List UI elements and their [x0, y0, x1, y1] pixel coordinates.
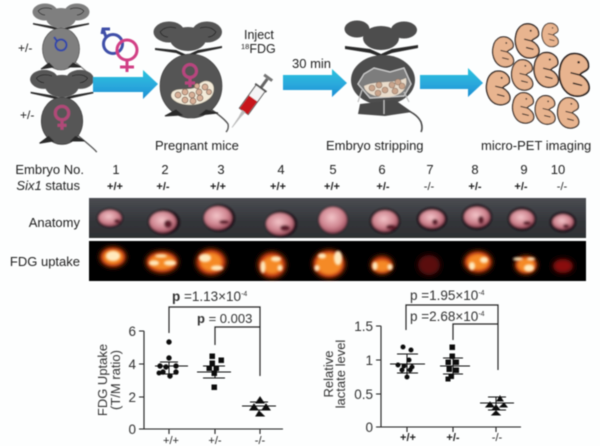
- embryo numbers: 8: [471, 162, 479, 177]
- y tick labels: 1.5: [354, 319, 373, 334]
- p value 2: -4: [478, 311, 485, 318]
- p value 2: p = 0.003: [197, 311, 252, 326]
- label: pregnant mice: Pregnant mice: [155, 138, 239, 153]
- icon: pregnant mouse: [154, 22, 228, 132]
- status labels: -/-: [557, 181, 568, 193]
- row label: Six1 status: Six1 status: [16, 178, 80, 193]
- chart: lactate scatter: [321, 288, 521, 444]
- y tick labels: [128, 324, 136, 437]
- status labels: +/-: [514, 181, 528, 193]
- status labels: -/-: [424, 181, 435, 193]
- x tick labels: [400, 432, 503, 444]
- y tick labels: 4: [128, 357, 136, 372]
- group +/+ points: [390, 345, 425, 379]
- group +/- points: [197, 354, 231, 390]
- row label: FDG uptake: FDG uptake: [10, 254, 80, 269]
- embryo numbers: 10: [551, 162, 565, 177]
- status labels: [107, 181, 568, 193]
- y tick labels: 2: [128, 390, 136, 405]
- status labels: +/-: [156, 181, 170, 193]
- status labels: +/-: [468, 181, 482, 193]
- panel: anatomy photo: [89, 198, 586, 238]
- y tick labels: 0.5: [354, 387, 373, 402]
- icon: embryos in uterus: [171, 81, 214, 105]
- x tick labels: -/-: [492, 432, 503, 444]
- arrow: to imaging: [420, 68, 483, 97]
- y axis label: lactate: lactate level: [333, 340, 348, 408]
- label: 18FDG: FDG: [249, 42, 276, 56]
- icon: female mouse: [30, 70, 97, 152]
- p value 1: p =1.13×10: [172, 289, 241, 304]
- status labels: +/+: [107, 181, 123, 193]
- label: 30 min: 30 min: [292, 56, 331, 71]
- chart: FDG uptake scatter: [95, 289, 283, 446]
- axes: [376, 326, 521, 432]
- label: embryo stripping: Embryo stripping: [326, 138, 424, 153]
- group +/- points: [440, 345, 470, 381]
- y tick labels: [354, 319, 373, 435]
- arrow: to pregnant mice: [93, 70, 158, 99]
- p value 1: -4: [478, 290, 485, 297]
- axes: [139, 331, 283, 434]
- label: female genotype: +/-: [20, 108, 34, 122]
- status labels: +/-: [376, 181, 390, 193]
- row label: embryo number: Embryo No.: [15, 162, 84, 177]
- embryo numbers: 4: [277, 162, 285, 177]
- label: micro-PET imaging: micro-PET imaging: [481, 138, 591, 153]
- icon: female symbol on mouse: [55, 106, 69, 130]
- p value 1: p =1.95×10: [410, 288, 478, 303]
- y tick labels: 0: [128, 422, 136, 437]
- icon: male symbol on mouse: [54, 37, 66, 50]
- significance brackets: [169, 307, 260, 376]
- icon: exposed embryos: [358, 68, 411, 114]
- icon: female symbol on pregnant mouse: [184, 64, 196, 87]
- arrow: to embryo stripping: [283, 69, 347, 97]
- embryo numbers: 5: [329, 162, 337, 177]
- row label: anatomy: Anatomy: [29, 215, 80, 230]
- status labels: +/+: [210, 181, 226, 193]
- y tick labels: 6: [128, 324, 136, 339]
- y axis label: lactate: Relative: [321, 351, 336, 397]
- status labels: +/+: [324, 181, 340, 193]
- significance brackets: [406, 305, 498, 370]
- x tick labels: +/-: [446, 432, 460, 444]
- embryo numbers: 7: [426, 162, 434, 177]
- icon: embryo group: [486, 23, 589, 128]
- x tick labels: [163, 435, 266, 446]
- status labels: +/+: [270, 181, 286, 193]
- y axis label: FDG uptake: (T/M ratio): [108, 350, 123, 410]
- icon: syringe: [226, 72, 275, 132]
- group +/+ points: [155, 340, 188, 378]
- icon: mating symbols: [102, 29, 137, 72]
- label: 18FDG: 18: [241, 42, 249, 51]
- icon: dissected mouse: [344, 20, 422, 132]
- group -/- points: [242, 397, 276, 416]
- x tick labels: +/+: [400, 432, 416, 444]
- label: male genotype: +/-: [18, 41, 32, 55]
- group -/- points: [480, 396, 514, 415]
- y tick labels: 1: [365, 353, 373, 368]
- y tick labels: 0: [365, 420, 373, 435]
- label: inject FDG: Inject: [244, 28, 274, 42]
- embryo numbers: 2: [161, 162, 169, 177]
- icon: male mouse: [32, 4, 92, 77]
- y axis label: FDG uptake: FDG Uptake: [95, 344, 110, 416]
- embryo numbers: 1: [112, 162, 120, 177]
- panel: FDG uptake PET image: [89, 241, 586, 281]
- embryo numbers: [112, 162, 565, 177]
- embryo numbers: 6: [378, 162, 386, 177]
- embryo numbers: 9: [520, 162, 528, 177]
- p value 1: -4: [241, 291, 247, 298]
- p value 2: p =2.68×10: [410, 309, 478, 324]
- embryo numbers: 3: [217, 162, 225, 177]
